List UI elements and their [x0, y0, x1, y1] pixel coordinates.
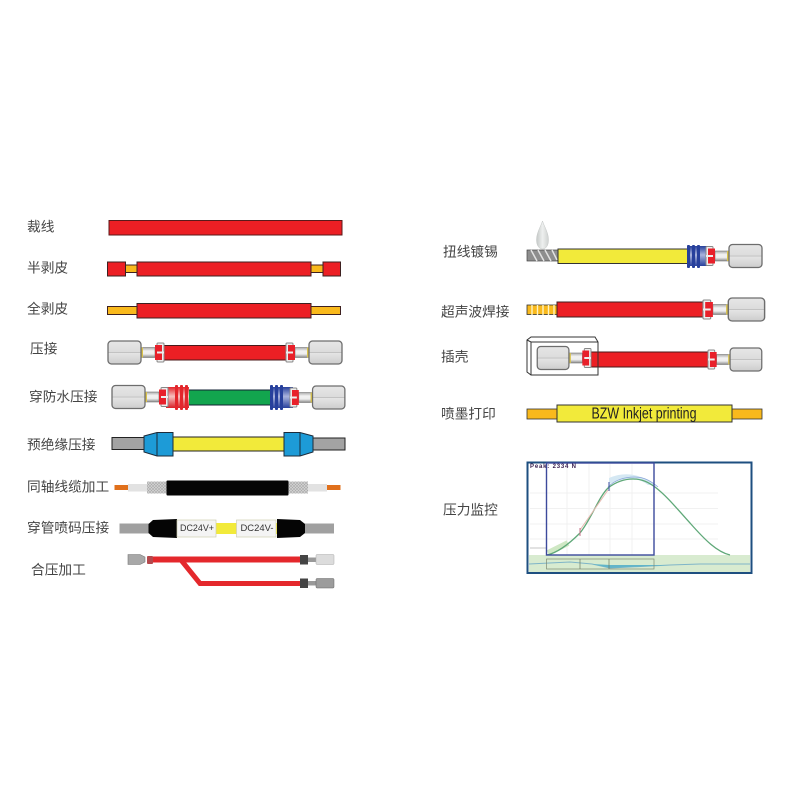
row: 合压加工: [31, 554, 334, 588]
label: 压力监控: 压力监控: [443, 502, 498, 518]
wire: cut red wire: [109, 220, 342, 235]
row: 裁线: [27, 220, 342, 235]
chart: crimp force monitoring: [528, 462, 752, 573]
wire: pre-insulated crimp: [112, 432, 345, 456]
wire: inkjet printed wire: [527, 405, 762, 422]
row: 压接: [30, 340, 342, 364]
label: 喷墨打印: 喷墨打印: [441, 406, 496, 422]
label: 裁线: 裁线: [27, 220, 55, 234]
wire: sleeve with printed markers: DC24V-: [240, 523, 274, 534]
wire: terminal inserted in housing: [527, 337, 762, 375]
label: 预绝缘压接: 预绝缘压接: [27, 436, 96, 452]
row: 同轴线缆加工: [27, 480, 340, 496]
label: 合压加工: 合压加工: [31, 562, 86, 578]
row: 压力监控: [443, 462, 752, 573]
wire: joined branch wires: [128, 554, 334, 588]
row: 全剥皮: [27, 300, 340, 318]
label: 扭线镀锡: 扭线镀锡: [443, 244, 498, 260]
label: 半剥皮: 半剥皮: [27, 260, 68, 276]
label: 压接: 压接: [30, 340, 58, 356]
label: 插壳: 插壳: [441, 348, 469, 364]
label: 穿防水压接: 穿防水压接: [29, 388, 98, 404]
row: 穿防水压接: [29, 385, 345, 410]
row: 预绝缘压接: [27, 432, 345, 456]
row: 扭线镀锡: [443, 221, 762, 268]
row: 穿管喷码压接: [27, 519, 334, 538]
label: 穿管喷码压接: 穿管喷码压接: [27, 520, 109, 536]
row: 超声波焊接: [441, 298, 765, 321]
wire: ultrasonic welded wire: [527, 298, 765, 321]
wire: inkjet printed wire: BZW Inkjet printing: [592, 406, 696, 422]
label: 超声波焊接: 超声波焊接: [441, 304, 510, 320]
wire: coaxial cable: [114, 480, 340, 496]
label: 同轴线缆加工: 同轴线缆加工: [27, 480, 109, 494]
wire: sleeve with printed markers: DC24V+: [180, 523, 214, 534]
row: 插壳: [441, 337, 762, 375]
wire: crimped both ends: [108, 341, 342, 364]
wire: tinned twisted wire: [527, 244, 762, 268]
label: 全剥皮: 全剥皮: [27, 300, 68, 316]
wire: fully stripped: [108, 304, 340, 318]
wire: waterproof seal crimp: [112, 385, 345, 410]
wire: half stripped: [108, 262, 340, 276]
wire: sleeve with printed markers: [120, 519, 334, 538]
icon: solder drop: [536, 221, 548, 249]
row: 半剥皮: [27, 260, 340, 276]
chart: crimp force monitoring: Peak: 2334 N: [530, 464, 576, 470]
row: 喷墨打印: [441, 405, 762, 422]
